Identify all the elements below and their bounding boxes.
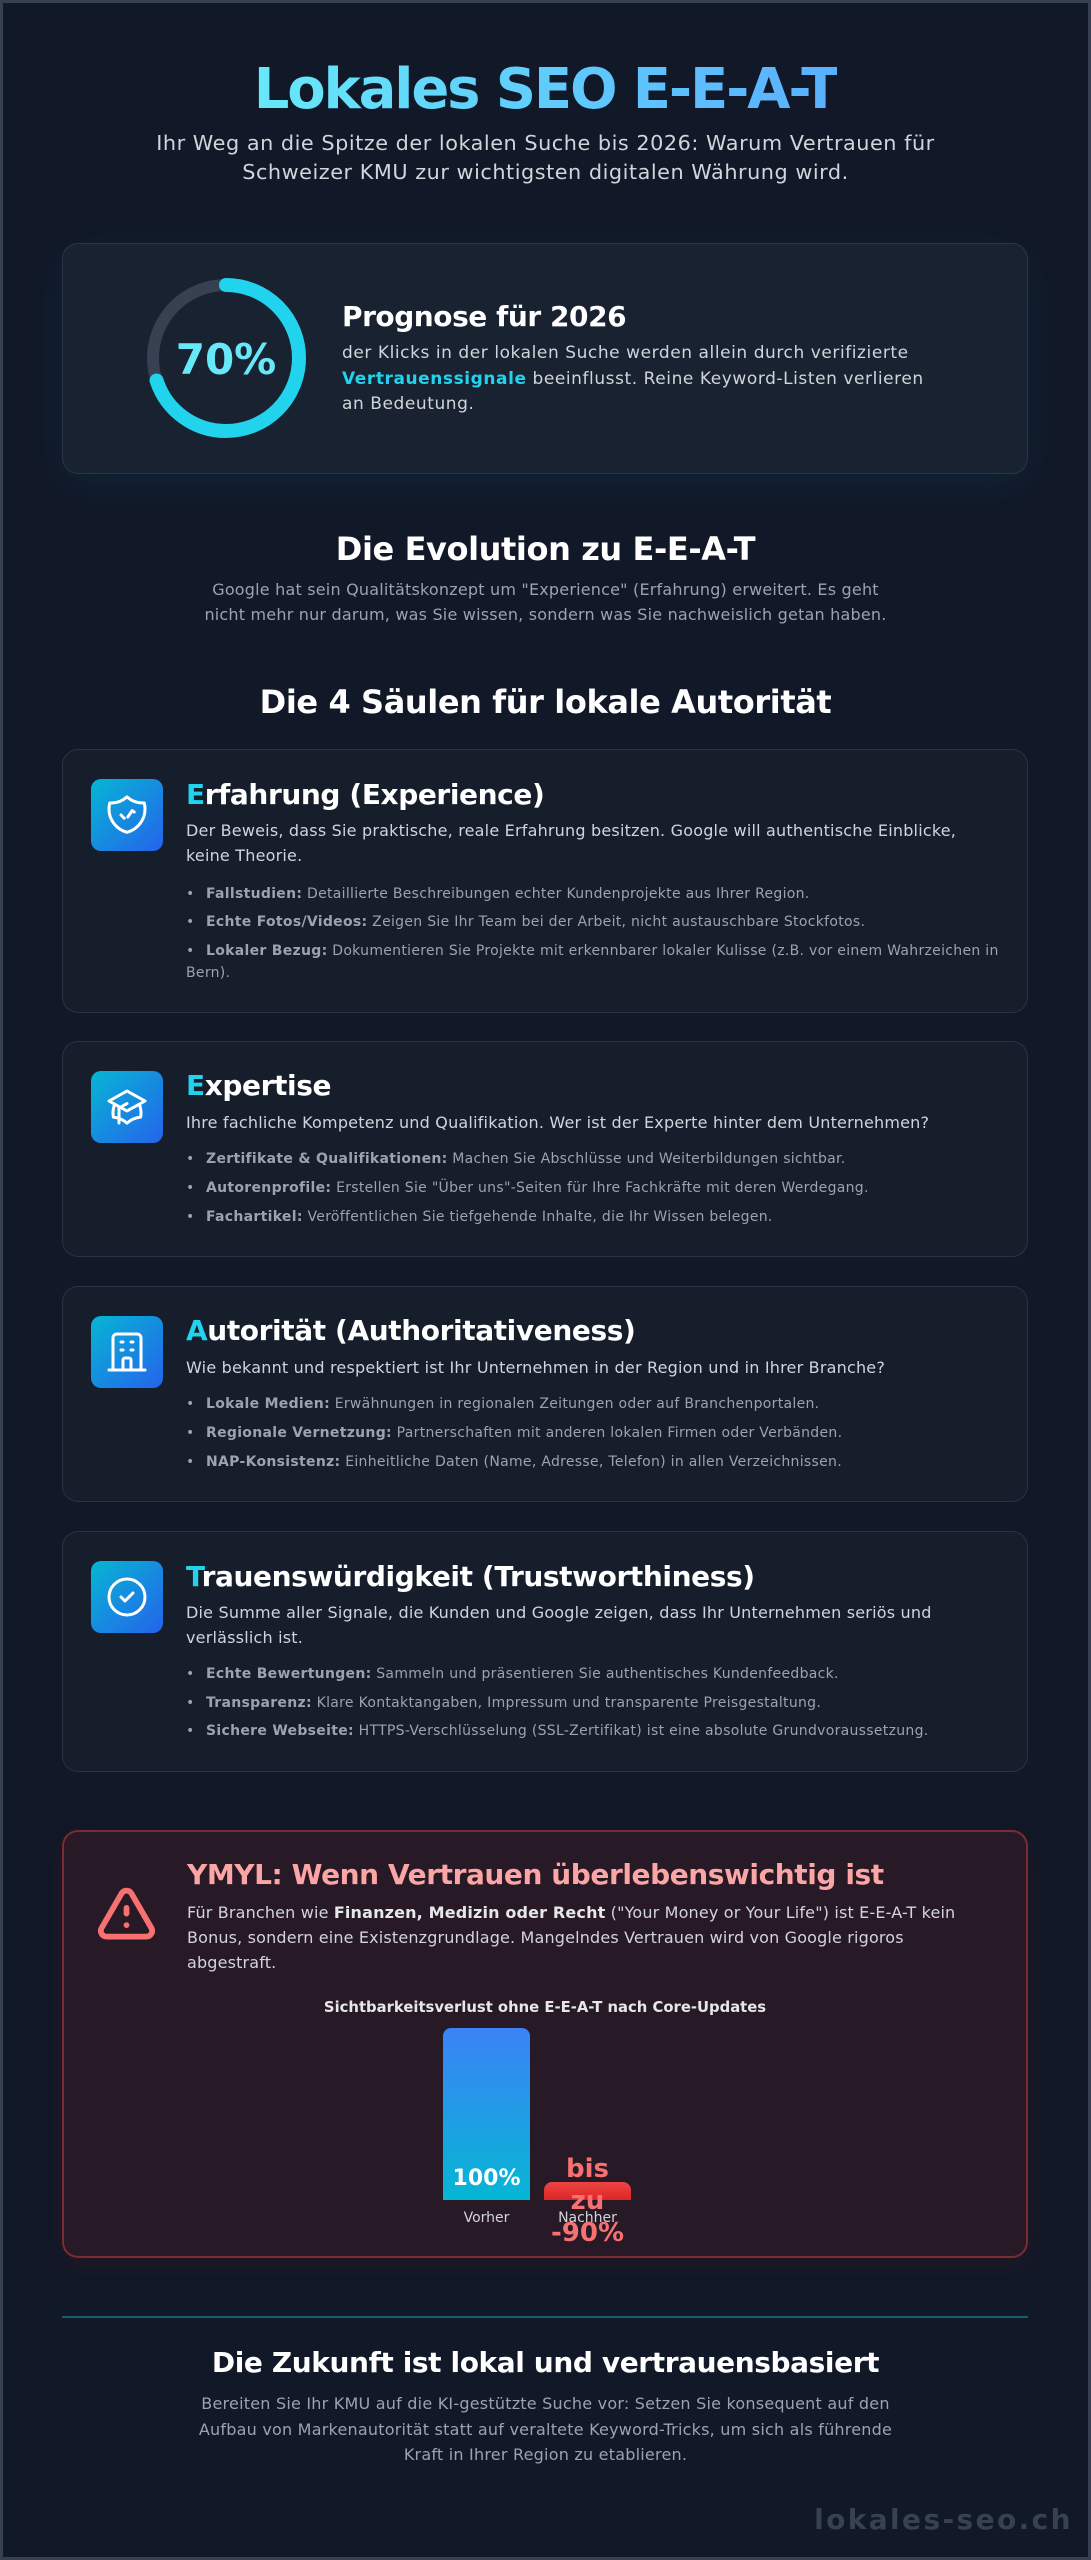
value: bis zu -90% [551, 2154, 624, 2248]
forecast text: der Klicks in der lokalen Suche werden allein durch verifizierte [342, 343, 909, 363]
heading: evolution: Die Evolution zu E-E-A-T [336, 530, 755, 568]
description: Wie bekannt und respektiert ist Ihr Unternehmen in der Region und in Ihrer Branche? [186, 1358, 885, 1377]
bullet: • [186, 1180, 195, 1196]
panel: Trauenswürdigkeit [62, 1531, 1028, 1772]
conclusion text: Bereiten Sie Ihr KMU auf die KI-gestützte Suche vor: Setzen Sie konsequent auf den [201, 2394, 890, 2413]
panel: Autorität [62, 1286, 1028, 1502]
forecast text [342, 343, 924, 414]
heading: Autorität (Authoritativeness) [186, 1314, 635, 1347]
chart title: Sichtbarkeitsverlust ohne E-E-A-T nach Core-Updates [324, 1999, 766, 2016]
conclusion text: Aufbau von Markenautorität statt auf veraltete Keyword-Tricks, um sich als führende [199, 2420, 892, 2438]
label: Nachher: Nachher [558, 2210, 617, 2226]
chart: 70 percent ring [147, 278, 306, 438]
description: keine Theorie. [186, 846, 302, 865]
heading: Expertise [186, 1069, 331, 1102]
description [186, 821, 956, 865]
description: Ihre fachliche Kompetenz und Qualifikation. Wer ist der Experte hinter dem Unternehmen? [186, 1113, 929, 1132]
panel: Erfahrung [62, 749, 1028, 1013]
icon: check circle [91, 1561, 163, 1633]
bullet: Zertifikate & Qualifikationen: Machen Sie Abschlüsse und Weiterbildungen sichtbar. [206, 1151, 846, 1167]
description: Der Beweis, dass Sie praktische, reale Erfahrung besitzen. Google will authentische Einblicke, [186, 821, 956, 840]
bullet [186, 943, 999, 981]
watermark: lokales-seo.ch [814, 2503, 1073, 2536]
icon: graduation cap [91, 1071, 163, 1143]
title: Lokales SEO E-E-A-T [254, 57, 837, 122]
bullet: Sichere Webseite: HTTPS-Verschlüsselung (SSL-Zertifikat) ist eine absolute Grundvoraussetzung. [206, 1723, 929, 1739]
conclusion text [199, 2394, 892, 2464]
label: Vorher: Vorher [464, 2210, 509, 2226]
divider [62, 2316, 1028, 2318]
bullet: • [186, 1209, 195, 1225]
description: verlässlich ist. [186, 1628, 303, 1647]
description: Die Summe aller Signale, die Kunden und Google zeigen, dass Ihr Unternehmen seriös und [186, 1603, 932, 1622]
heading: Trauenswürdigkeit (Trustworthiness) [186, 1560, 755, 1593]
bullet: Bern). [186, 965, 230, 981]
bullet: • [186, 1454, 195, 1470]
conclusion heading: Die Zukunft ist lokal und vertrauensbasiert [212, 2346, 879, 2379]
conclusion text: Kraft in Ihrer Region zu etablieren. [404, 2445, 687, 2464]
panel: YMYL alert [62, 1830, 1028, 2258]
panel: forecast [62, 243, 1028, 474]
bullet: • [186, 1695, 195, 1711]
bar: Nachher [544, 2182, 631, 2200]
stat: 70%: 70% [176, 335, 276, 384]
heading: Erfahrung (Experience) [186, 778, 544, 811]
value: 100%: 100% [453, 2166, 520, 2191]
evolution text [204, 580, 887, 624]
bullet: Regionale Vernetzung: Partnerschaften mit anderen lokalen Firmen oder Verbänden. [206, 1425, 842, 1441]
bullet: Echte Fotos/Videos: Zeigen Sie Ihr Team bei der Arbeit, nicht austauschbare Stockfotos. [206, 914, 865, 930]
bullet: Lokaler Bezug: Dokumentieren Sie Projekte mit erkennbarer lokaler Kulisse (z.B. vor einem Wahrzeichen in [206, 943, 999, 959]
bullet: • [186, 1666, 195, 1682]
bullet: Autorenprofile: Erstellen Sie "Über uns"-Seiten für Ihre Fachkräfte mit deren Werdegang. [206, 1180, 869, 1196]
forecast heading: Prognose für 2026 [342, 300, 626, 333]
bullet: • [186, 914, 195, 930]
icon: building [91, 1316, 163, 1388]
bullet: Transparenz: Klare Kontaktangaben, Impressum und transparente Preisgestaltung. [206, 1695, 821, 1711]
bar: Vorher [443, 2028, 530, 2200]
chart: visibility loss [324, 1999, 766, 2248]
icon: shield [91, 779, 163, 851]
value: bis zu -90%: zu [571, 2186, 604, 2216]
alert text [187, 1903, 955, 1972]
alert text: Bonus, sondern eine Existenzgrundlage. Mangelndes Vertrauen wird von Google rigoros [187, 1928, 904, 1947]
bullet: • [186, 1723, 195, 1739]
subtitle: Ihr Weg an die Spitze der lokalen Suche bis 2026: Warum Vertrauen für [156, 131, 935, 155]
bullet: • [186, 1396, 195, 1412]
description [186, 1603, 932, 1647]
evolution text: nicht mehr nur darum, was Sie wissen, sondern was Sie nachweislich getan haben. [204, 604, 887, 624]
bullet: • [186, 943, 195, 959]
alert heading: YMYL: Wenn Vertrauen überlebenswichtig ist [187, 1858, 884, 1891]
bullet: Fallstudien: Detaillierte Beschreibungen echter Kundenprojekte aus Ihrer Region. [206, 886, 810, 902]
subtitle: Schweizer KMU zur wichtigsten digitalen Währung wird. [242, 160, 849, 184]
bullet: • [186, 1425, 195, 1441]
forecast text: Vertrauenssignale beeinflusst. Reine Keyword-Listen verlieren [342, 369, 924, 389]
value: bis zu -90%: bis [566, 2154, 609, 2184]
alert text: abgestraft. [187, 1953, 276, 1972]
bullet: • [186, 886, 195, 902]
subtitle [156, 131, 935, 184]
icon: warning triangle [98, 1888, 156, 1940]
bullet: • [186, 1151, 195, 1167]
alert text: Für Branchen wie Finanzen, Medizin oder Recht ("Your Money or Your Life") ist E-E-A-T kein [187, 1903, 955, 1922]
heading: four pillars: Die 4 Säulen für lokale Autorität [260, 683, 831, 721]
bullet: Echte Bewertungen: Sammeln und präsentieren Sie authentisches Kundenfeedback. [206, 1666, 839, 1682]
panel: Expertise [62, 1041, 1028, 1257]
bullet: Lokale Medien: Erwähnungen in regionalen Zeitungen oder auf Branchenportalen. [206, 1396, 819, 1412]
forecast text: an Bedeutung. [342, 394, 474, 414]
bullet: NAP-Konsistenz: Einheitliche Daten (Name, Adresse, Telefon) in allen Verzeichnissen. [206, 1454, 842, 1470]
bullet: Fachartikel: Veröffentlichen Sie tiefgehende Inhalte, die Ihr Wissen belegen. [206, 1209, 773, 1225]
value: bis zu -90%: -90% [551, 2218, 624, 2248]
evolution text: Google hat sein Qualitätskonzept um "Experience" (Erfahrung) erweitert. Es geht [212, 580, 879, 599]
